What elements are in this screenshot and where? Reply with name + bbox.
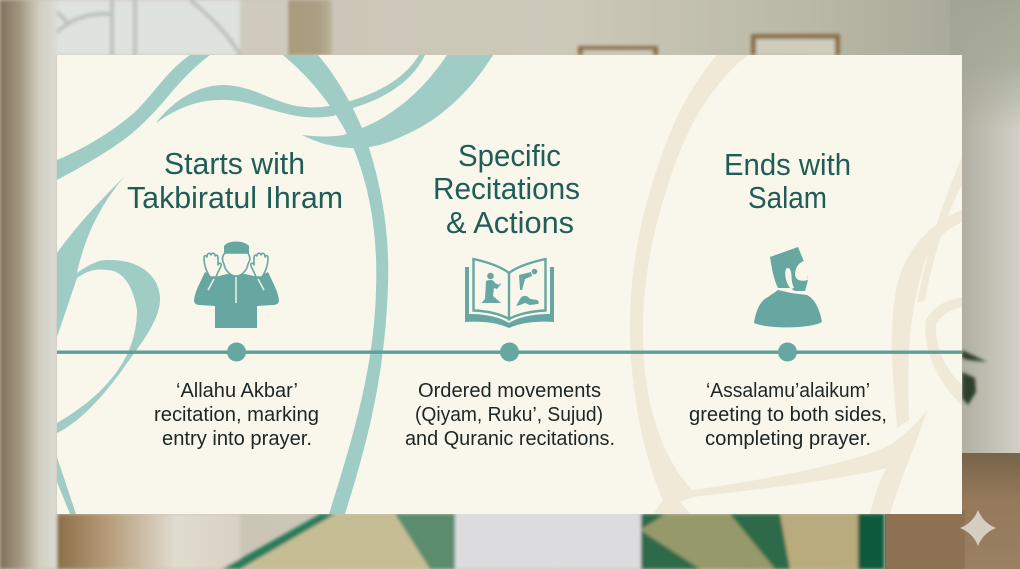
description 2: Ordered movements: [418, 380, 601, 402]
column 3: ends with Salam: [689, 147, 887, 450]
heading: step 3: Ends with: [724, 147, 851, 182]
column 1: starts with Takbiratul Ihram: [127, 146, 343, 450]
icon: bearded man turning head: [754, 247, 822, 327]
description 3: greeting to both sides,: [689, 404, 887, 426]
icon: open book with prayer positions: [465, 259, 554, 328]
heading: step 2: Recitations: [433, 171, 580, 206]
timeline line: [57, 350, 962, 354]
heading: step 1: Takbiratul Ihram: [127, 180, 343, 215]
description 2: (Qiyam, Ruku’, Sujud): [415, 404, 603, 426]
timeline marker 1: [227, 342, 246, 362]
timeline marker 3: [778, 342, 797, 362]
description 3: completing prayer.: [705, 428, 871, 450]
description 2: and Quranic recitations.: [405, 428, 615, 450]
timeline marker 2: [500, 342, 519, 362]
icon: man raising hands: [194, 242, 279, 328]
decorative teal and cream swirls: [57, 55, 962, 514]
description 1: recitation, marking: [154, 404, 319, 426]
heading: step 1: Starts with: [164, 146, 305, 181]
description 1: entry into prayer.: [162, 428, 312, 450]
heading: step 2: & Actions: [446, 205, 574, 240]
heading: step 3: Salam: [748, 180, 827, 215]
description 3: ‘Assalamu’alaikum’: [706, 380, 870, 402]
icon: sparkle star: [960, 510, 996, 546]
description 1: ‘Allahu Akbar’: [176, 380, 298, 402]
column 2: specific recitations and actions: [405, 138, 615, 450]
panel: cream card: [57, 55, 962, 514]
heading: step 2: Specific: [458, 138, 561, 173]
